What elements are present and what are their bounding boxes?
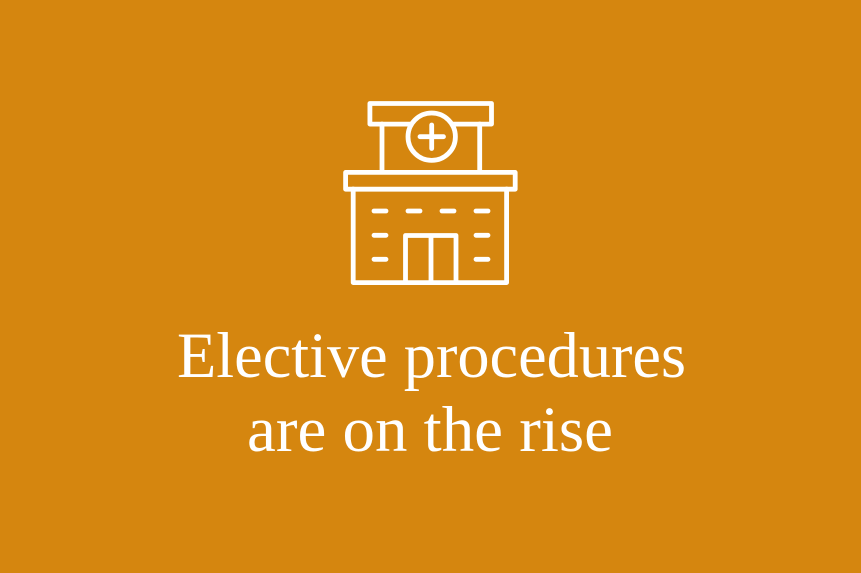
icon: double door: [406, 236, 456, 283]
icon: medical cross in circle: [408, 113, 455, 160]
headline line 1: Elective procedures: [177, 320, 686, 392]
icon: windows: [374, 211, 488, 259]
icon: upper sign board: [370, 104, 492, 124]
icon: upper storey walls: [382, 124, 480, 170]
headline line 2: are on the rise: [247, 394, 613, 466]
icon: hospital building: [346, 104, 515, 283]
headline: [177, 320, 686, 466]
icon: lower storey walls: [353, 189, 507, 283]
icon: roof slab: [346, 172, 515, 189]
